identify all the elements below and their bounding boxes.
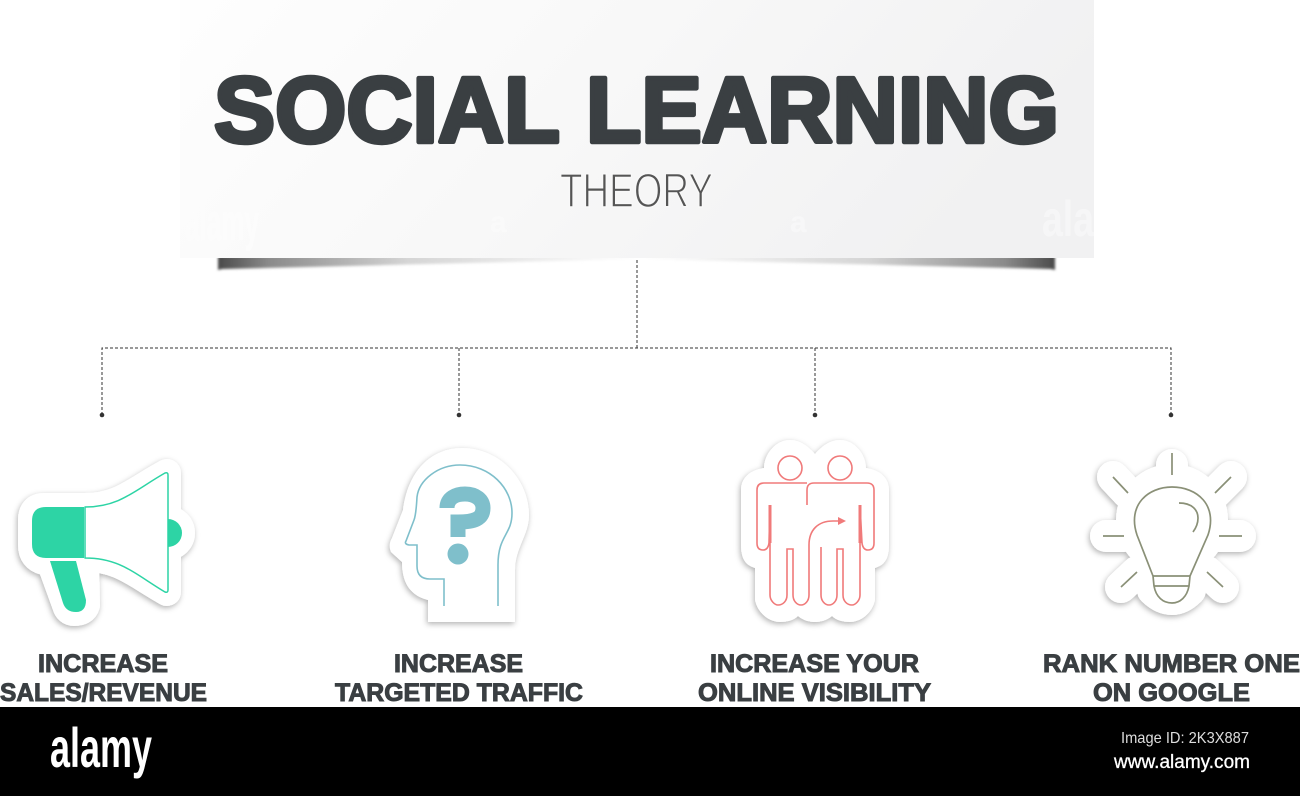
label: increase targeted traffic: TARGETED TRAFFIC	[335, 679, 583, 707]
label: increase your online visibility	[698, 650, 931, 707]
subtitle: THEORY	[560, 165, 713, 218]
footer bar: www.alamy.com	[1113, 752, 1250, 773]
title: LEARNING	[586, 58, 1059, 162]
panel: title card: a	[790, 206, 807, 239]
icon: megaphone	[32, 473, 182, 612]
title	[214, 58, 1059, 162]
footer bar: Image ID: 2K3X887	[1121, 730, 1249, 747]
footer bar	[0, 707, 1300, 796]
icon: head with question mark	[390, 448, 529, 622]
label: rank number one on google: ON GOOGLE	[1093, 679, 1250, 707]
icon: two people with arrow	[741, 440, 889, 622]
panel: title card: a	[490, 206, 507, 239]
footer bar: alamy	[50, 716, 152, 779]
label: increase targeted traffic	[335, 650, 583, 707]
label: increase sales/revenue: INCREASE	[38, 650, 168, 678]
label: rank number one on google	[1043, 650, 1300, 707]
label: rank number one on google: RANK NUMBER ONE	[1043, 650, 1300, 678]
title: SOCIAL	[214, 58, 560, 162]
label: increase targeted traffic: INCREASE	[394, 650, 523, 678]
panel: title card: alamy	[185, 194, 259, 252]
panel: title card	[180, 0, 1095, 258]
connector tree	[100, 260, 1173, 417]
label: increase your online visibility: INCREASE YOUR	[710, 650, 919, 678]
label: increase your online visibility: ONLINE VISIBILITY	[698, 679, 931, 707]
icon: light bulb	[1103, 453, 1242, 603]
label: increase sales/revenue: SALES/REVENUE	[0, 679, 207, 707]
title card shadow	[218, 256, 1055, 270]
label: increase sales/revenue	[0, 650, 207, 707]
panel: title card: ala	[1042, 191, 1095, 247]
